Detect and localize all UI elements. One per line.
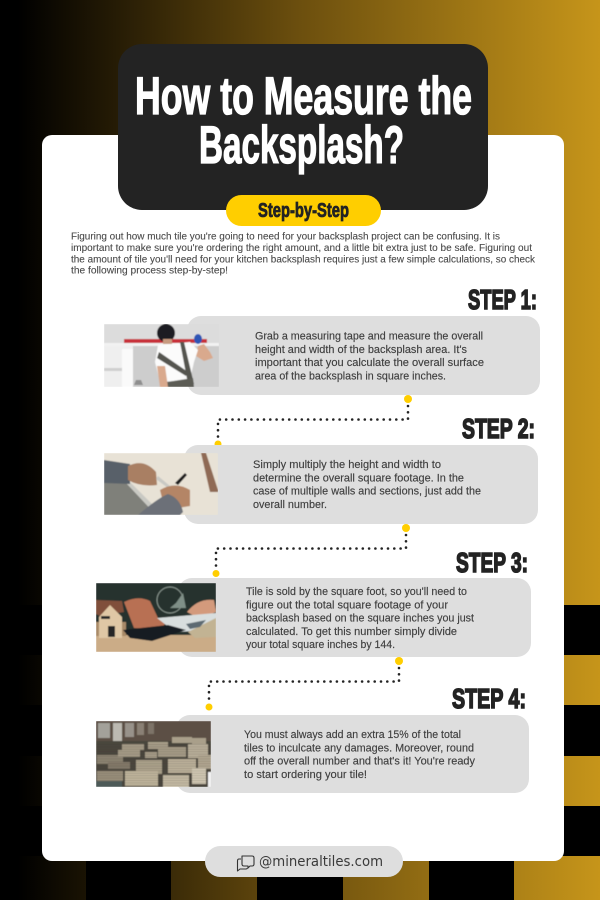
footer handle pill: @mineraltiles.com: [259, 854, 383, 870]
title panel: [118, 44, 488, 210]
step 2 panel: case of multiple walls and sections, just add the: [253, 486, 481, 498]
footer handle pill: [205, 846, 403, 877]
icon: chat bubbles: [238, 856, 254, 871]
step 3 panel: backsplash based on the square inches you just: [246, 612, 475, 624]
step 2 panel: [184, 445, 538, 524]
step 2 panel: Simply multiply the height and width to: [253, 459, 441, 471]
step 3 panel: calculated. To get this number simply divide: [246, 626, 457, 638]
step 1 panel: Grab a measuring tape and measure the overall: [255, 330, 483, 342]
connector end dot: [214, 440, 222, 448]
step-by-step badge: Step-by-Step: [258, 200, 349, 222]
background checker pattern: [0, 605, 600, 900]
intro paragraph: [71, 232, 535, 276]
step 3 panel: figure out the total square footage of your: [246, 599, 448, 611]
step 1 panel: [187, 316, 540, 395]
intro paragraph: the amount of tile you'll need for your kitchen backsplash requires just a few simple calculations, so check: [71, 254, 535, 266]
step 2 heading: STEP 2:: [462, 413, 535, 444]
step 4 heading: STEP 4:: [452, 683, 526, 714]
step-by-step badge: [226, 195, 381, 226]
step 1 panel: area of the backsplash in square inches.: [255, 370, 446, 382]
step 3 photo: calculator and model house: [96, 583, 216, 652]
title panel: Backsplash?: [199, 116, 404, 175]
intro paragraph: the following process step-by-step!: [71, 266, 228, 276]
step 1 photo: worker measuring wall: [104, 324, 219, 387]
step 3 panel: [178, 578, 531, 657]
white content card: [42, 135, 564, 861]
step 4 photo: tile warehouse: [96, 721, 211, 787]
step 3 heading: STEP 3:: [456, 547, 528, 578]
step 4 panel: tiles to inculcate any damages. Moreover, round: [244, 742, 474, 754]
step 4 panel: [176, 715, 529, 793]
connector 3 to 4: [206, 657, 403, 710]
intro paragraph: Figuring out how much tile you're going to need for your backsplash project can be confusing. It is: [71, 232, 500, 242]
step 1 panel: height and width of the backsplash area. It's: [255, 344, 467, 356]
step 3 panel: Tile is sold by the square foot, so you'll need to: [246, 586, 467, 598]
connector 2 to 3: [212, 524, 410, 577]
step 1 heading: STEP 1:: [468, 284, 537, 315]
step 2 panel: determine the overall square footage. In the: [253, 472, 464, 484]
connector 1 to 2: [218, 395, 412, 438]
step 4 panel: to start ordering your tile!: [244, 769, 367, 781]
step 4 panel: You must always add an extra 15% of the total: [244, 729, 461, 741]
step 4 panel: off the overall number and that's it! You're ready: [244, 756, 475, 768]
step 3 panel: your total square inches by 144.: [246, 639, 395, 651]
step 2 panel: overall number.: [253, 499, 327, 511]
step 2 photo: hands marking tile: [104, 453, 218, 515]
intro paragraph: important to make sure you're ordering the right amount, and a little bit extra just to be safe. Figuring out: [71, 243, 532, 254]
step 1 panel: important that you calculate the overall surface: [255, 357, 484, 369]
